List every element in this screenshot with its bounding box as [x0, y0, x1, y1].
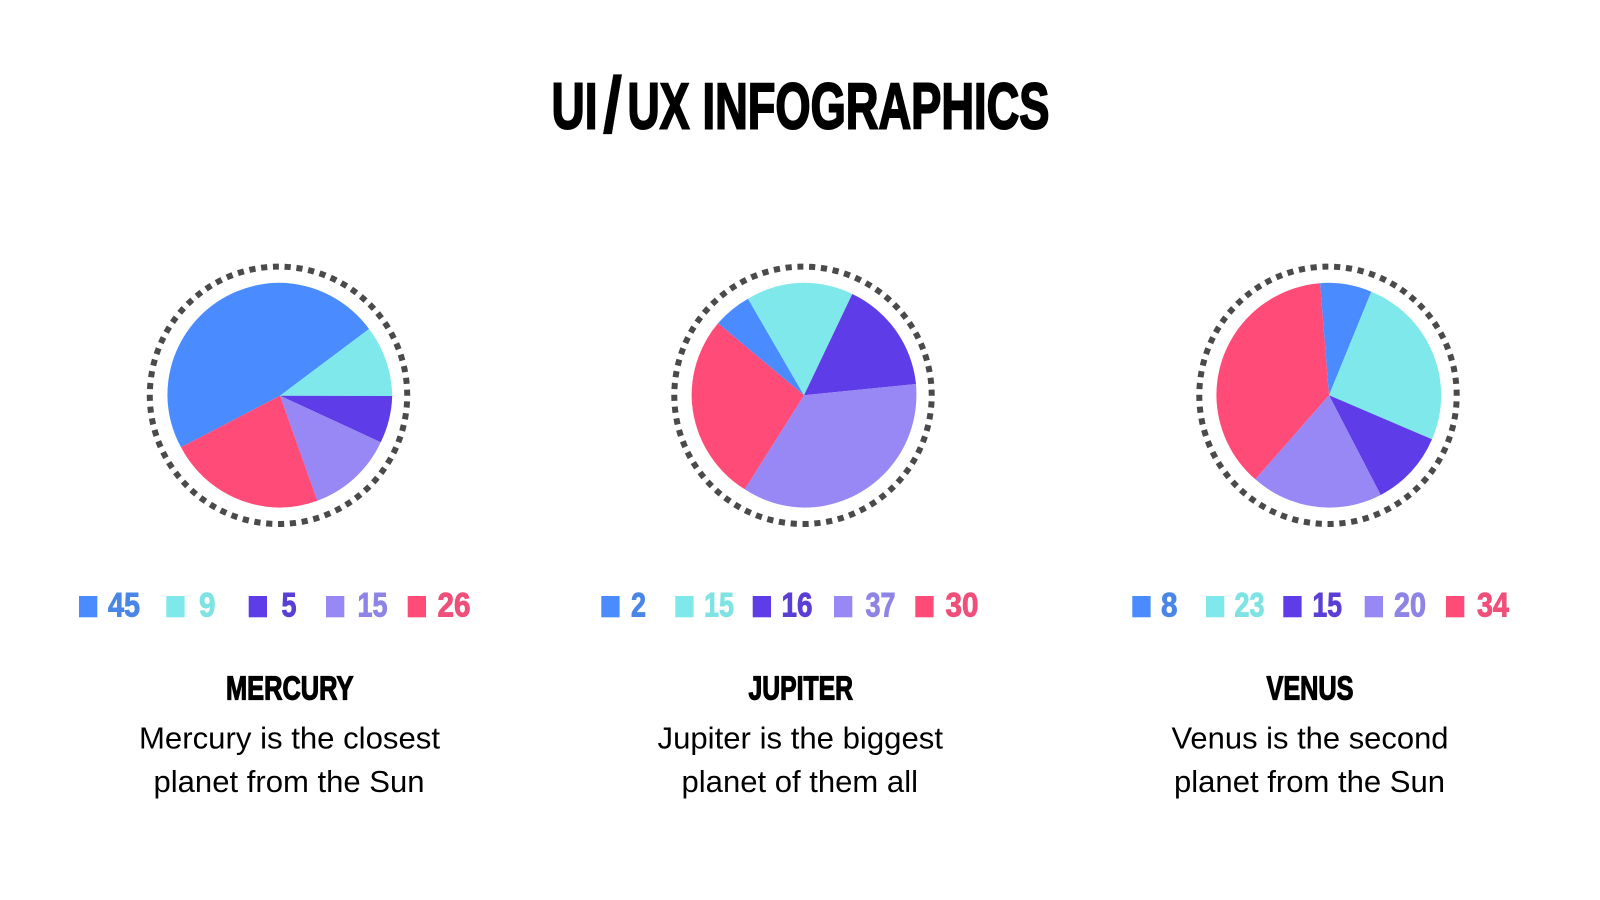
legend: mercury: 26: [438, 587, 470, 625]
description: mercury: Mercury is the closest: [139, 721, 441, 755]
heading: venus: VENUS: [1266, 670, 1354, 706]
legend: venus: 15: [1312, 587, 1342, 625]
title: INFOGRAPHICS: [702, 70, 1050, 142]
description: venus: [1172, 721, 1448, 799]
legend: venus: [1132, 587, 1509, 625]
legend: jupiter: 2: [631, 587, 646, 625]
panel: mercury: [79, 264, 470, 799]
legend: mercury: [79, 587, 470, 625]
legend: jupiter: 30: [946, 587, 978, 625]
title: /: [602, 60, 622, 150]
description: jupiter: [658, 721, 944, 799]
legend: mercury: 9: [199, 587, 216, 625]
legend: jupiter: 15: [704, 587, 734, 625]
title: [552, 60, 1050, 150]
legend: mercury: 45: [108, 587, 140, 625]
legend: venus: 8: [1161, 587, 1178, 625]
description: mercury: [139, 721, 441, 799]
pie chart: venus: [1197, 264, 1459, 527]
pie chart: mercury: [147, 264, 410, 527]
legend: venus: 20: [1394, 587, 1426, 625]
title: UI: [552, 70, 598, 142]
description: jupiter: planet of them all: [682, 765, 918, 799]
legend: jupiter: 37: [866, 587, 896, 625]
pie chart: jupiter: [672, 264, 934, 527]
panel: jupiter: [601, 264, 978, 799]
description: venus: Venus is the second: [1172, 721, 1448, 755]
legend: jupiter: [601, 587, 978, 625]
description: jupiter: Jupiter is the biggest: [658, 721, 944, 755]
legend: mercury: 15: [358, 587, 388, 625]
legend: jupiter: 16: [782, 587, 812, 625]
panel: venus: [1132, 264, 1509, 799]
title: UX: [628, 70, 690, 142]
description: mercury: planet from the Sun: [154, 765, 424, 799]
heading: jupiter: JUPITER: [748, 670, 853, 706]
legend: mercury: 5: [282, 587, 296, 625]
heading: mercury: MERCURY: [226, 670, 354, 706]
description: venus: planet from the Sun: [1174, 765, 1445, 799]
legend: venus: 23: [1234, 587, 1264, 625]
legend: venus: 34: [1477, 587, 1509, 625]
